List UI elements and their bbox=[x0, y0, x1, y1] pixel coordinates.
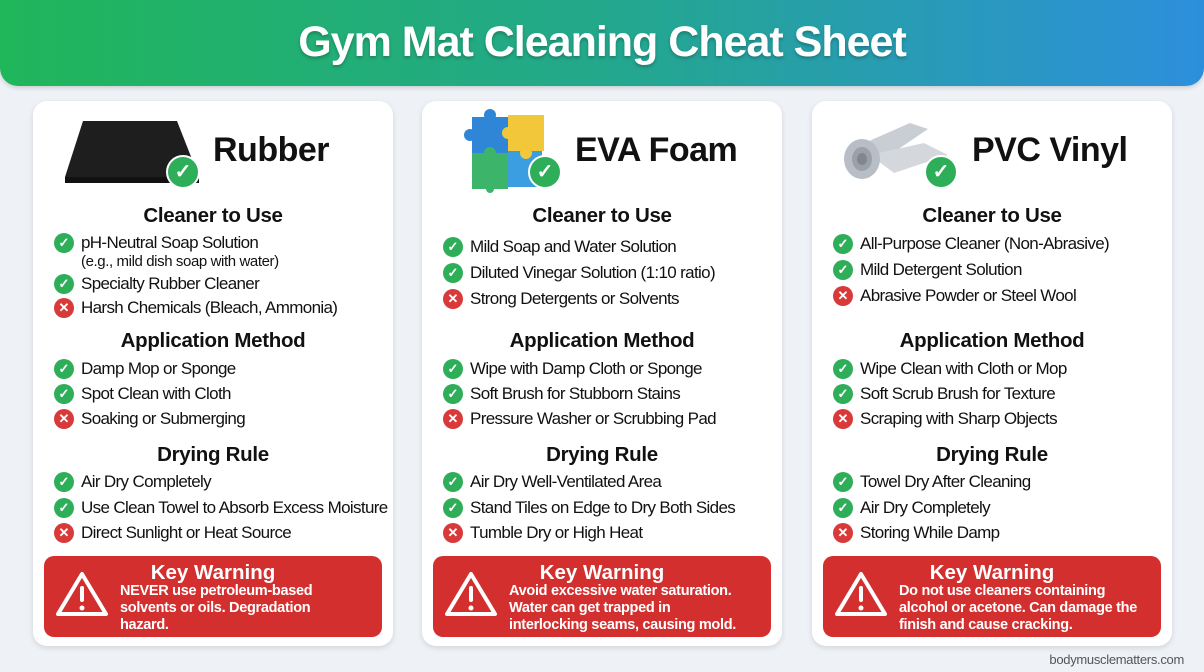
heading: drying: Drying Rule bbox=[157, 443, 269, 466]
item: ✓ bbox=[448, 239, 458, 254]
item: ✕ bbox=[448, 291, 458, 306]
item: Mild Soap and Water Solution bbox=[470, 237, 676, 256]
warning text: hazard. bbox=[120, 617, 169, 633]
item: ✓ bbox=[59, 361, 69, 376]
warning title: Key Warning bbox=[151, 561, 275, 584]
item: ✓ bbox=[448, 386, 458, 401]
item: ✓ bbox=[59, 276, 69, 291]
item: Storing While Damp bbox=[860, 523, 999, 542]
warning text: Avoid excessive water saturation. bbox=[509, 583, 731, 599]
item: ✕ bbox=[59, 525, 69, 540]
item: Abrasive Powder or Steel Wool bbox=[860, 286, 1076, 305]
footer credit: bodymusclematters.com bbox=[1049, 652, 1184, 667]
warning title: Key Warning bbox=[930, 561, 1054, 584]
warning text bbox=[899, 583, 1137, 633]
warning text: NEVER use petroleum-based bbox=[120, 583, 312, 599]
icon: check badge bbox=[924, 155, 958, 189]
item: ✓ bbox=[59, 474, 69, 489]
heading: application: Application Method bbox=[510, 329, 694, 352]
heading: cleaner: Cleaner to Use bbox=[143, 204, 283, 227]
item: Soft Brush for Stubborn Stains bbox=[470, 384, 680, 403]
item: ✓ bbox=[838, 361, 848, 376]
sub note: (e.g., mild dish soap with water) bbox=[81, 253, 279, 270]
warning text: solvents or oils. Degradation bbox=[120, 600, 310, 616]
item: Air Dry Well-Ventilated Area bbox=[470, 472, 661, 491]
title: pvc vinyl: PVC Vinyl bbox=[972, 131, 1128, 169]
icon: warning bbox=[56, 572, 108, 616]
item: Soft Scrub Brush for Texture bbox=[860, 384, 1055, 403]
warning text: Do not use cleaners containing bbox=[899, 583, 1105, 599]
warning text bbox=[509, 583, 736, 633]
warning box bbox=[433, 556, 771, 637]
item: ✓ bbox=[59, 386, 69, 401]
icon: puzzle tiles bbox=[464, 109, 544, 193]
item: Use Clean Towel to Absorb Excess Moisture bbox=[81, 498, 388, 517]
item: Soaking or Submerging bbox=[81, 409, 245, 428]
panel: eva foam bbox=[422, 101, 782, 646]
item: ✕ bbox=[838, 288, 848, 303]
title: rubber: Rubber bbox=[213, 131, 329, 169]
item: Diluted Vinegar Solution (1:10 ratio) bbox=[470, 263, 715, 282]
item: ✕ bbox=[448, 525, 458, 540]
heading: cleaner: Cleaner to Use bbox=[922, 204, 1062, 227]
item: All-Purpose Cleaner (Non-Abrasive) bbox=[860, 234, 1109, 253]
icon: check badge: ✓ bbox=[175, 161, 191, 183]
item: Mild Detergent Solution bbox=[860, 260, 1022, 279]
item: Direct Sunlight or Heat Source bbox=[81, 523, 291, 542]
panel: pvc vinyl bbox=[812, 101, 1172, 646]
item: ✓ bbox=[59, 235, 69, 250]
item: Spot Clean with Cloth bbox=[81, 384, 231, 403]
warning text: Water can get trapped in bbox=[509, 600, 670, 616]
header banner bbox=[0, 0, 1204, 86]
icon: vinyl roll bbox=[844, 123, 948, 179]
heading: application: Application Method bbox=[121, 329, 305, 352]
panel: rubber bbox=[33, 101, 393, 646]
icon: warning bbox=[835, 572, 888, 616]
item: ✓ bbox=[448, 474, 458, 489]
item: ✕ bbox=[448, 411, 458, 426]
warning text: alcohol or acetone. Can damage the bbox=[899, 600, 1137, 616]
heading: application: Application Method bbox=[900, 329, 1084, 352]
item: Wipe Clean with Cloth or Mop bbox=[860, 359, 1067, 378]
item: Wipe with Damp Cloth or Sponge bbox=[470, 359, 702, 378]
warning text: finish and cause cracking. bbox=[899, 617, 1073, 633]
item: Towel Dry After Cleaning bbox=[860, 472, 1031, 491]
item: Air Dry Completely bbox=[860, 498, 990, 517]
heading: drying: Drying Rule bbox=[546, 443, 658, 466]
item: Harsh Chemicals (Bleach, Ammonia) bbox=[81, 298, 337, 317]
item: ✓ bbox=[838, 386, 848, 401]
item: Pressure Washer or Scrubbing Pad bbox=[470, 409, 716, 428]
warning text bbox=[120, 583, 312, 633]
item: ✓ bbox=[448, 500, 458, 515]
item: Damp Mop or Sponge bbox=[81, 359, 236, 378]
item: ✓ bbox=[838, 474, 848, 489]
item: ✓ bbox=[838, 500, 848, 515]
item: pH-Neutral Soap Solution bbox=[81, 233, 258, 252]
item: ✓ bbox=[838, 262, 848, 277]
item: ✕ bbox=[838, 411, 848, 426]
heading: drying: Drying Rule bbox=[936, 443, 1048, 466]
item: Scraping with Sharp Objects bbox=[860, 409, 1057, 428]
item: Air Dry Completely bbox=[81, 472, 211, 491]
item: Specialty Rubber Cleaner bbox=[81, 274, 259, 293]
icon: check badge: ✓ bbox=[537, 161, 553, 183]
item: ✓ bbox=[59, 500, 69, 515]
warning title: Key Warning bbox=[540, 561, 664, 584]
icon: check badge bbox=[166, 155, 200, 189]
warning box bbox=[44, 556, 382, 637]
icon: warning bbox=[445, 572, 498, 616]
item: ✓ bbox=[448, 265, 458, 280]
icon: rubber mat bbox=[65, 121, 199, 183]
header banner: Gym Mat Cleaning Cheat Sheet bbox=[298, 18, 906, 66]
item: ✓ bbox=[448, 361, 458, 376]
item: Tumble Dry or High Heat bbox=[470, 523, 642, 542]
icon: check badge bbox=[528, 155, 562, 189]
warning box bbox=[823, 556, 1161, 637]
item: ✕ bbox=[59, 411, 69, 426]
item: ✕ bbox=[838, 525, 848, 540]
warning text: interlocking seams, causing mold. bbox=[509, 617, 736, 633]
icon: check badge: ✓ bbox=[933, 161, 949, 183]
item: ✓ bbox=[838, 236, 848, 251]
title: eva foam: EVA Foam bbox=[575, 131, 737, 169]
item: Stand Tiles on Edge to Dry Both Sides bbox=[470, 498, 735, 517]
heading: cleaner: Cleaner to Use bbox=[532, 204, 672, 227]
item: ✕ bbox=[59, 300, 69, 315]
item: Strong Detergents or Solvents bbox=[470, 289, 679, 308]
